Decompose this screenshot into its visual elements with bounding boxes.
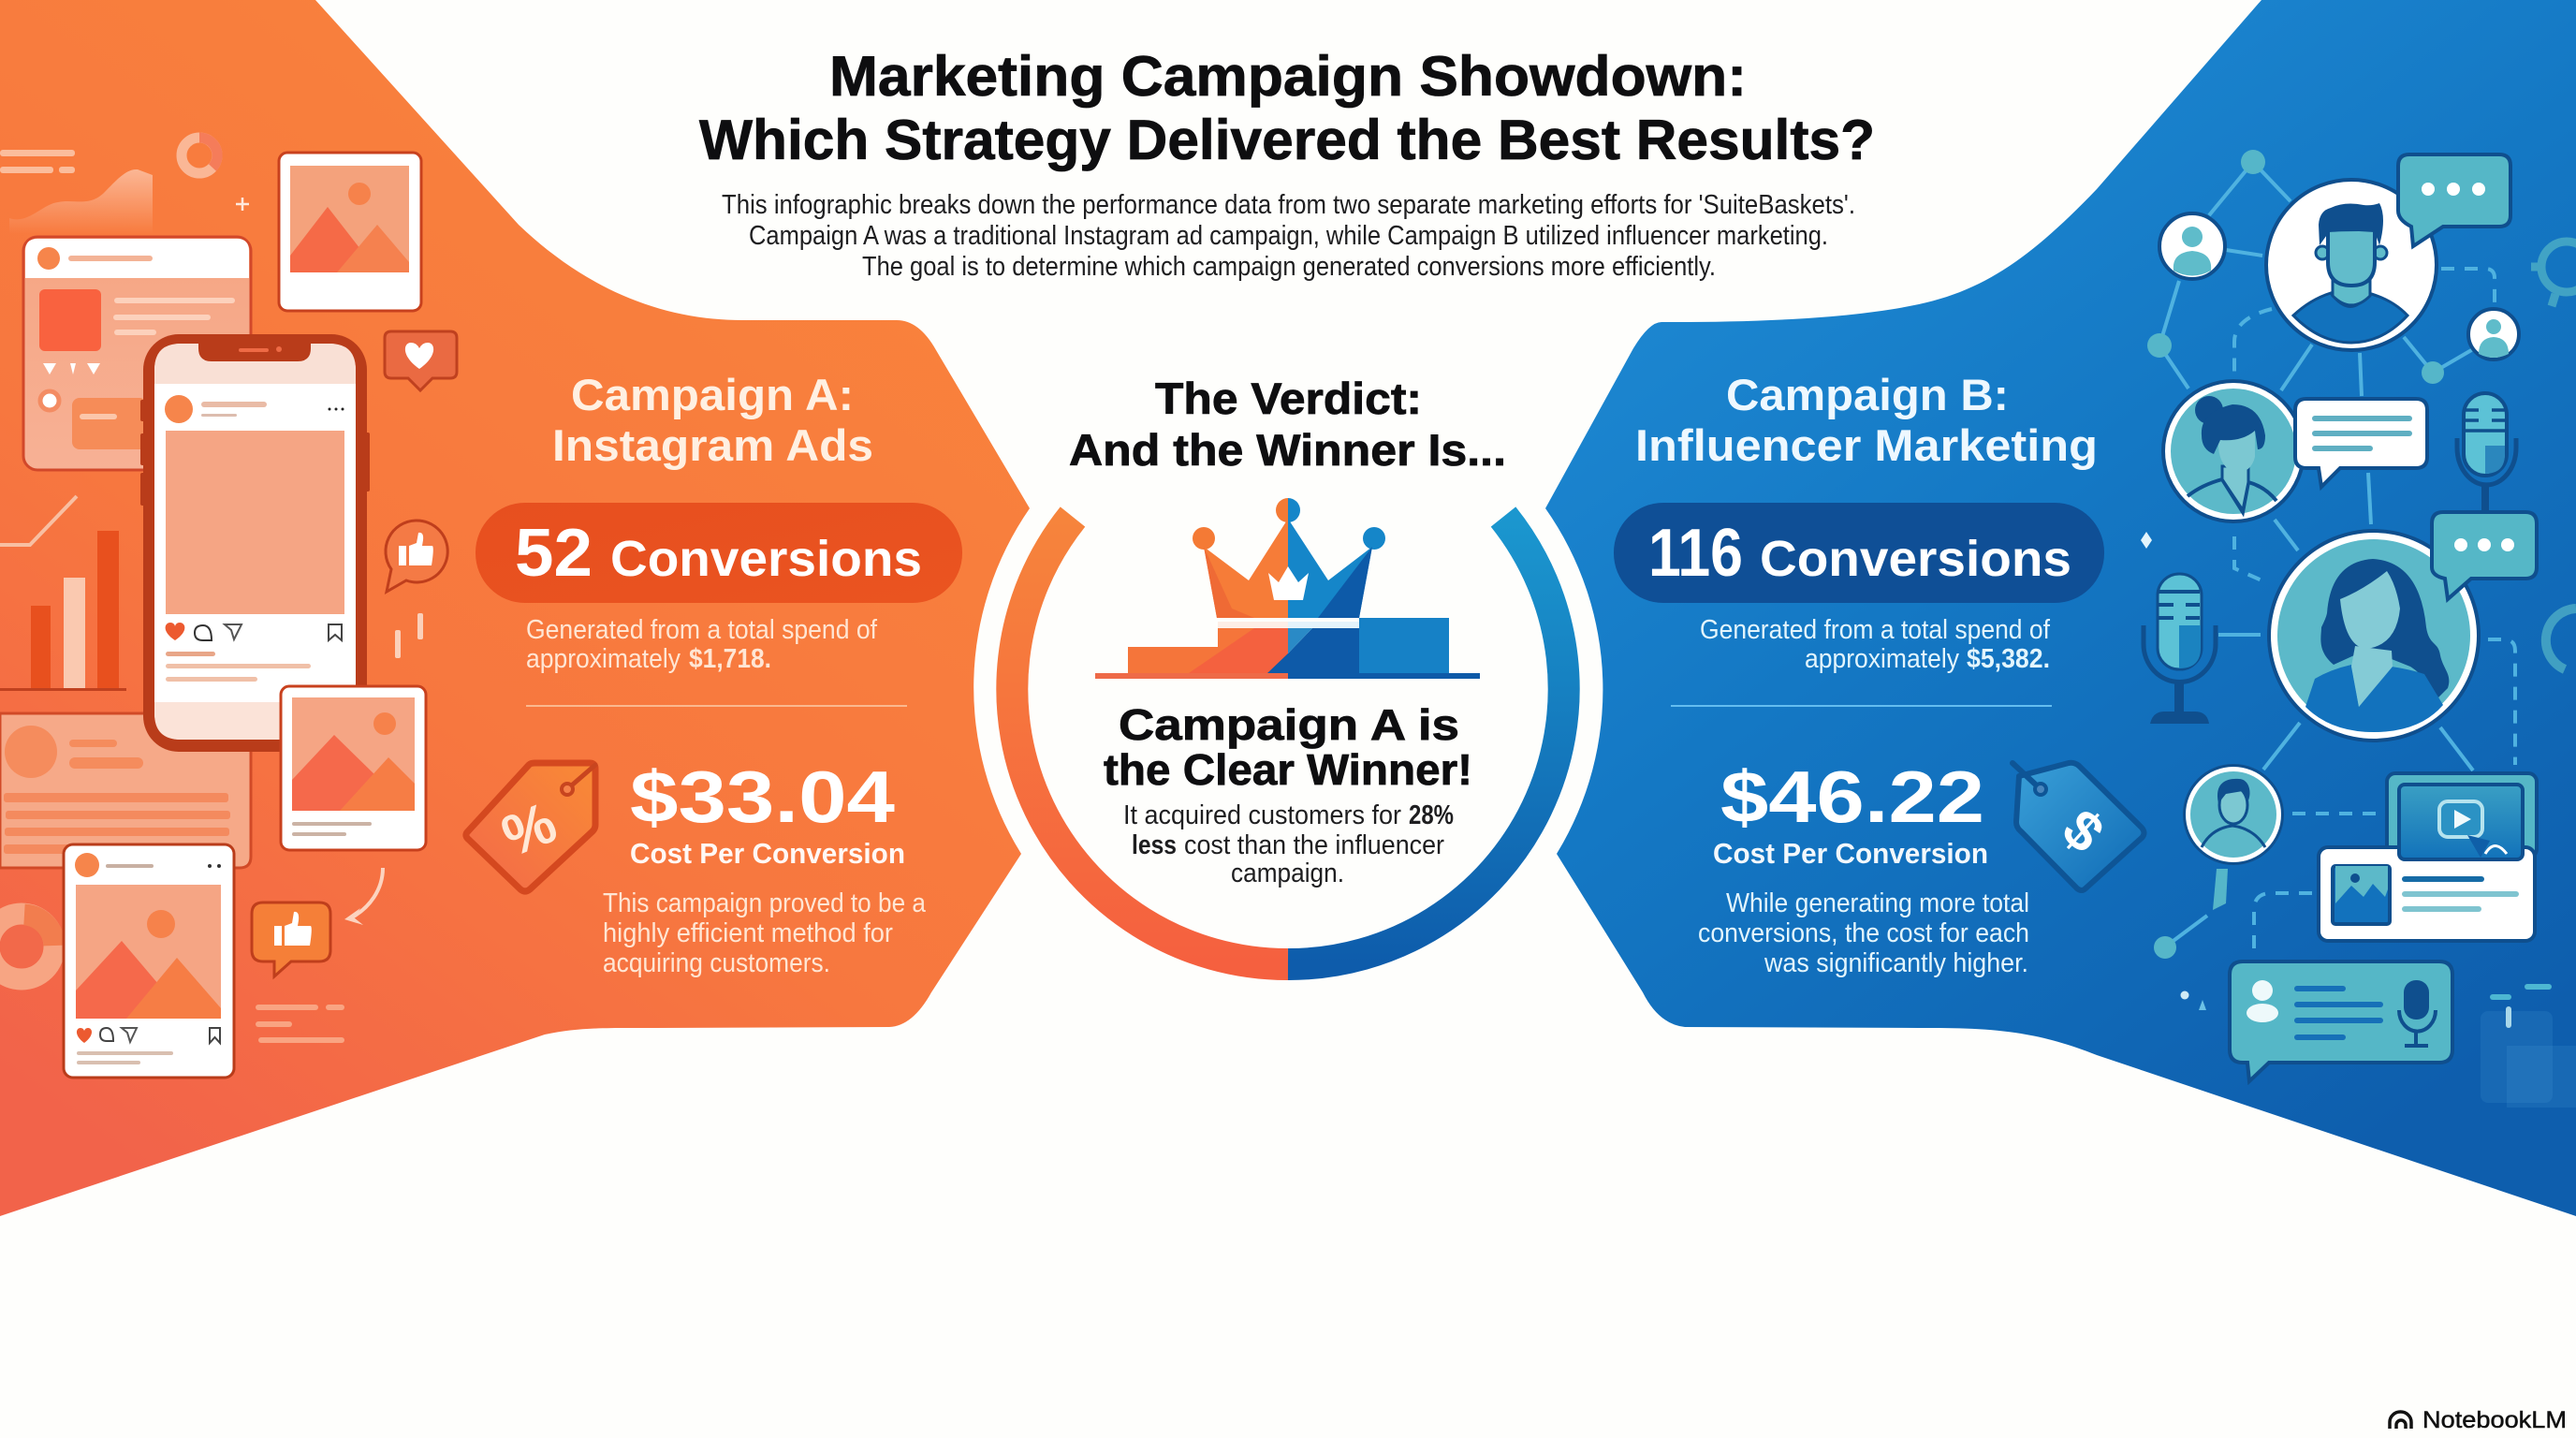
icon: dollar tag (2012, 763, 2144, 890)
conversions pill A: 52 (515, 516, 593, 591)
spend text B: $5,382. (1967, 644, 2050, 674)
line trend (0, 496, 77, 545)
video card (2387, 773, 2537, 858)
conversions pill B: Conversions (1760, 531, 2071, 587)
decorative text lines (0, 150, 75, 173)
verdict explanation: campaign. (1231, 858, 1344, 888)
title (699, 45, 1875, 171)
intro text block: This infographic breaks down the performance data from two separate marketing efforts for 'SuiteBaskets'. (722, 190, 1855, 220)
metric: cost per conversion A (630, 756, 905, 870)
description B: conversions, the cost for each (1698, 918, 2029, 948)
description A: This campaign proved to be a (603, 888, 927, 918)
sparkle (2141, 532, 2152, 549)
metric: cost per conversion B (1713, 756, 1988, 870)
panel content: campaign A (466, 370, 962, 978)
avatar: woman large (2267, 529, 2481, 742)
bubble: white chat (2295, 399, 2427, 487)
spend text A: Generated from a total spend of (526, 615, 878, 645)
photo card middle (281, 686, 426, 850)
donut chart bottom (0, 914, 54, 979)
description A: acquiring customers. (603, 948, 830, 978)
verdict winner statement: Campaign A is (1119, 700, 1459, 749)
heading B (1635, 370, 2098, 470)
spend text A: $1,718. (689, 644, 771, 674)
faded gear bottom (2546, 609, 2576, 669)
photo card top (279, 153, 421, 311)
spend text B: approximately (1805, 644, 1959, 674)
verdict winner statement (1104, 700, 1472, 794)
bubble: typing middle (2432, 512, 2537, 599)
icon: microphone left (2144, 574, 2216, 724)
network nodes (2147, 150, 2444, 959)
spend text B (1700, 615, 2051, 674)
spend text B: Generated from a total spend of (1700, 615, 2051, 645)
bubble: podcast chat bottom (2230, 961, 2452, 1081)
verdict heading: And the Winner Is... (1069, 425, 1506, 475)
card: social post behind phone (23, 237, 251, 470)
avatar: man small (2183, 764, 2284, 865)
icon: percent tag: % (493, 790, 565, 870)
verdict explanation: less (1132, 830, 1177, 860)
icon: heart bubble (385, 331, 457, 390)
panel content: campaign B (1614, 370, 2144, 978)
spend text A: approximately (526, 644, 681, 674)
bubble: typing top (2398, 154, 2510, 246)
sparkle (236, 198, 249, 211)
description B (1698, 888, 2029, 978)
divider (526, 705, 907, 707)
icon: notebook arcs (2390, 1412, 2411, 1429)
NotebookLM logo: NotebookLM (2422, 1407, 2567, 1433)
intro text block (722, 190, 1855, 282)
avatar: woman with bun (2161, 379, 2305, 523)
description B: While generating more total (1726, 888, 2029, 918)
description B: was significantly higher. (1764, 948, 2028, 978)
verdict heading: The Verdict: (1155, 374, 1422, 423)
spend text A (526, 615, 878, 674)
verdict winner statement: the Clear Winner! (1104, 745, 1472, 794)
verdict explanation: 28% (1409, 800, 1454, 830)
post card bottom (64, 844, 234, 1078)
verdict explanation (1123, 800, 1454, 888)
heading B: Campaign B: (1726, 370, 2009, 419)
network lines (2159, 162, 2515, 948)
description A: highly efficient method for (603, 918, 893, 948)
heading A: Campaign A: (571, 370, 854, 419)
intro text block: The goal is to determine which campaign generated conversions more efficiently. (862, 252, 1716, 282)
verdict explanation: It acquired customers for (1123, 800, 1401, 830)
avatar: small left (2159, 213, 2225, 279)
decorative short lines (256, 1005, 344, 1043)
icon: crown on podium (1095, 498, 1480, 679)
metric: cost per conversion B: $46.22 (1720, 756, 1984, 838)
faded city block (2481, 984, 2576, 1108)
conversions pill A (476, 503, 962, 603)
card: wide post behind (0, 713, 251, 868)
verdict ring (1012, 517, 1564, 964)
metric: cost per conversion B: Cost Per Conversion (1713, 837, 1988, 870)
avatar: man large (2266, 180, 2437, 350)
divider (1671, 705, 2052, 707)
verdict explanation: cost than the influencer (1184, 830, 1444, 860)
avatar: small right (2468, 309, 2519, 360)
faded gear top (2531, 242, 2576, 306)
verdict heading (1069, 374, 1506, 475)
metric: cost per conversion A: $33.04 (630, 756, 895, 838)
icon: like circle bubble (386, 521, 447, 592)
arrow (344, 868, 383, 925)
heading A: Instagram Ads (552, 420, 873, 470)
heading A (552, 370, 873, 470)
conversions pill A: Conversions (610, 531, 922, 587)
bar chart (0, 531, 126, 691)
small dashes (395, 613, 423, 658)
title: Which Strategy Delivered the Best Results? (699, 109, 1875, 171)
description A (603, 888, 927, 978)
metric: cost per conversion A: Cost Per Conversion (630, 837, 905, 870)
icon: percent tag (466, 763, 595, 891)
area chart (9, 169, 153, 234)
panel: campaign B background (1545, 0, 2576, 1216)
video player screen (2399, 785, 2523, 859)
phone (140, 334, 370, 752)
icon: microphone top right (2457, 393, 2516, 513)
panel: campaign A background (0, 0, 1030, 1216)
intro text block: Campaign A was a traditional Instagram ad campaign, while Campaign B utilized influencer marketing. (749, 221, 1828, 251)
illustration: instagram collage (0, 138, 457, 1078)
small bits (2181, 990, 2206, 1010)
icon: like square bubble (252, 902, 330, 976)
conversions pill B: 116 (1648, 516, 1743, 591)
donut chart top (182, 138, 217, 173)
media card white (2319, 847, 2535, 941)
title: Marketing Campaign Showdown: (829, 45, 1747, 108)
illustration: influencer network (2141, 150, 2576, 1108)
icon: dollar tag: $ (2051, 797, 2115, 864)
heading B: Influencer Marketing (1635, 420, 2098, 470)
conversions pill B (1614, 503, 2104, 603)
